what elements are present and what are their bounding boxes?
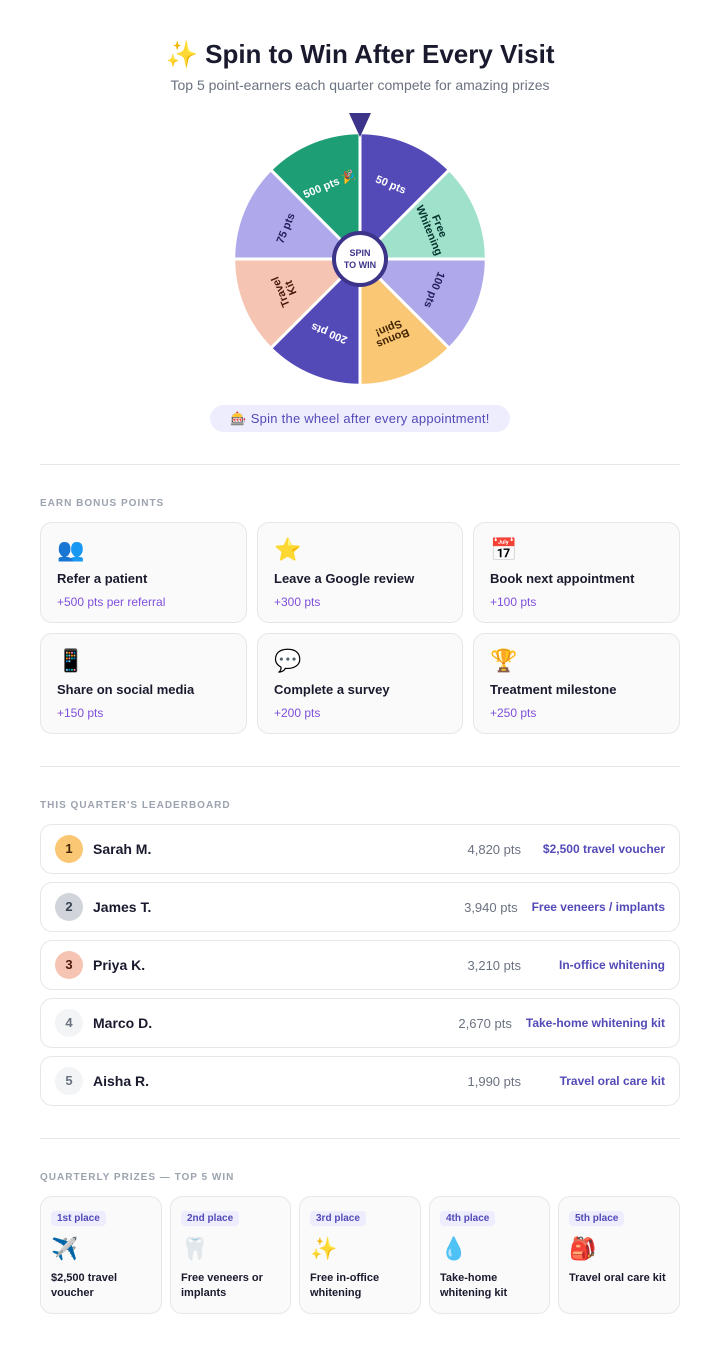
heading: leaderboard: THIS QUARTER'S LEADERBOARD	[40, 800, 231, 811]
prize card: 5th place: Travel oral care kit	[569, 1272, 666, 1284]
subtitle: Top 5 point-earners each quarter compete for amazing prizes	[170, 77, 549, 93]
panel: google review: ⭐	[274, 537, 301, 562]
leaderboard row 4: 2,670 pts	[458, 1016, 512, 1030]
wheel segment: 50 pts: 50 pts	[374, 173, 408, 197]
leaderboard row 1	[40, 824, 680, 874]
leaderboard row 3: 3,210 pts	[468, 958, 521, 972]
panel: book next appointment: Book next appointment	[490, 571, 634, 586]
prize card: 3rd place: ✨	[310, 1236, 337, 1261]
panel: refer a patient: 👥	[57, 537, 84, 562]
wheel segment: travel kit: Travel	[269, 275, 293, 309]
leaderboard row 2: 3,940 pts	[464, 900, 518, 914]
wheel hub: TO WIN	[344, 260, 376, 270]
heading: earn bonus points: EARN BONUS POINTS	[40, 498, 164, 509]
panel: share on social media: 📱	[57, 648, 84, 673]
leaderboard row 2: Free veneers / implants	[532, 900, 665, 914]
prize card: 1st place: ✈️	[51, 1236, 78, 1261]
panel: complete a survey: Complete a survey	[274, 682, 390, 697]
wheel segment: 500 pts: 500 pts 🎉	[301, 168, 357, 201]
wheel segment: 75 pts: 75 pts	[274, 211, 298, 245]
prize card: 2nd place: 🦷	[181, 1236, 208, 1261]
prize card: 3rd place	[299, 1196, 421, 1314]
prize card: 4th place: 4th place	[446, 1213, 489, 1224]
leaderboard row 1: 1	[65, 841, 73, 856]
panel: complete a survey: 💬	[274, 648, 301, 673]
panel: treatment milestone	[473, 633, 680, 734]
panel: refer a patient: Refer a patient	[57, 571, 147, 586]
wheel segment: travel kit: Kit	[283, 278, 300, 297]
prize card: 4th place: Take-home whitening kit	[440, 1272, 507, 1299]
heading: quarterly prizes: QUARTERLY PRIZES — TOP 5 WIN	[40, 1172, 234, 1183]
prize card: 3rd place: 3rd place	[316, 1213, 360, 1224]
wheel segment: bonus spin: Spin!	[374, 317, 404, 339]
leaderboard row 2: James T.	[93, 899, 151, 915]
wheel segment: 200 pts	[272, 259, 360, 384]
wheel segment: 200 pts: 200 pts	[310, 320, 349, 346]
wheel segment: free whitening: Free	[429, 213, 449, 239]
wheel segment: 100 pts: 100 pts	[421, 270, 447, 309]
wheel segment: 100 pts	[360, 259, 485, 347]
leaderboard row 4: Marco D.	[93, 1015, 152, 1031]
leaderboard row 5: 5	[65, 1073, 73, 1088]
prize card: 4th place: 💧	[440, 1236, 467, 1261]
panel: share on social media: Share on social media	[57, 682, 194, 697]
leaderboard row 1: $2,500 travel voucher	[543, 842, 665, 856]
leaderboard row 3	[40, 940, 680, 990]
spin wheel	[235, 113, 485, 384]
leaderboard row 5: Aisha R.	[93, 1073, 149, 1089]
panel: treatment milestone: Treatment milestone	[490, 682, 616, 697]
panel: refer a patient: +500 pts per referral	[57, 595, 165, 609]
wheel hub	[334, 233, 386, 285]
panel: book next appointment: +100 pts	[490, 595, 536, 609]
leaderboard row 4: 4	[65, 1015, 73, 1030]
wheel segment: travel kit	[235, 259, 360, 347]
panel: google review: +300 pts	[274, 595, 320, 609]
prize card: 3rd place: Free in-office whitening	[310, 1272, 379, 1299]
callout pill: 🎰 Spin the wheel after every appointment!	[230, 411, 490, 426]
leaderboard row 3: Priya K.	[93, 957, 145, 973]
prize card: 4th place	[429, 1196, 550, 1314]
callout pill	[210, 405, 510, 432]
panel: complete a survey	[257, 633, 463, 734]
leaderboard row 2: 2	[65, 899, 73, 914]
prize card: 2nd place: 2nd place	[187, 1213, 233, 1224]
panel: share on social media	[40, 633, 247, 734]
prize card: 2nd place: Free veneers or implants	[181, 1272, 263, 1299]
leaderboard row 3: 3	[65, 957, 73, 972]
leaderboard row 1: 4,820 pts	[468, 842, 521, 856]
leaderboard row 2	[40, 882, 680, 932]
wheel segment: free whitening: Whitening	[413, 204, 445, 257]
leaderboard row 4: Take-home whitening kit	[526, 1016, 665, 1030]
wheel segment: 500 pts	[272, 134, 360, 259]
leaderboard row 1: Sarah M.	[93, 841, 151, 857]
prize card: 1st place	[40, 1196, 162, 1314]
panel: book next appointment: 📅	[490, 537, 517, 562]
panel: treatment milestone: 🏆	[490, 648, 517, 673]
wheel segment: 50 pts	[360, 134, 448, 259]
panel: share on social media: +150 pts	[57, 706, 103, 720]
prize card: 5th place: 🎒	[569, 1236, 596, 1261]
wheel segment: free whitening	[360, 171, 485, 259]
title: ✨ Spin to Win After Every Visit	[166, 39, 554, 69]
panel: book next appointment	[473, 522, 680, 623]
panel: google review: Leave a Google review	[274, 571, 414, 586]
panel: treatment milestone: +250 pts	[490, 706, 536, 720]
leaderboard row 5: 1,990 pts	[468, 1074, 521, 1088]
prize card: 2nd place	[170, 1196, 291, 1314]
icon: wheel pointer	[349, 113, 371, 137]
wheel segment: bonus spin: Bonus	[375, 326, 411, 350]
prize card: 5th place: 5th place	[575, 1213, 618, 1224]
leaderboard row 5: Travel oral care kit	[560, 1074, 665, 1088]
wheel hub: SPIN	[349, 248, 371, 258]
prize card: 1st place: 1st place	[57, 1213, 100, 1224]
leaderboard row 4	[40, 998, 680, 1048]
panel: refer a patient	[40, 522, 247, 623]
leaderboard row 3: In-office whitening	[559, 958, 665, 972]
prize card: 1st place: $2,500 travel voucher	[51, 1272, 117, 1299]
panel: google review	[257, 522, 463, 623]
leaderboard row 5	[40, 1056, 680, 1106]
wheel segment: bonus spin	[360, 259, 448, 384]
prize card: 5th place	[558, 1196, 680, 1314]
panel: complete a survey: +200 pts	[274, 706, 320, 720]
wheel segment: 75 pts	[235, 171, 360, 259]
